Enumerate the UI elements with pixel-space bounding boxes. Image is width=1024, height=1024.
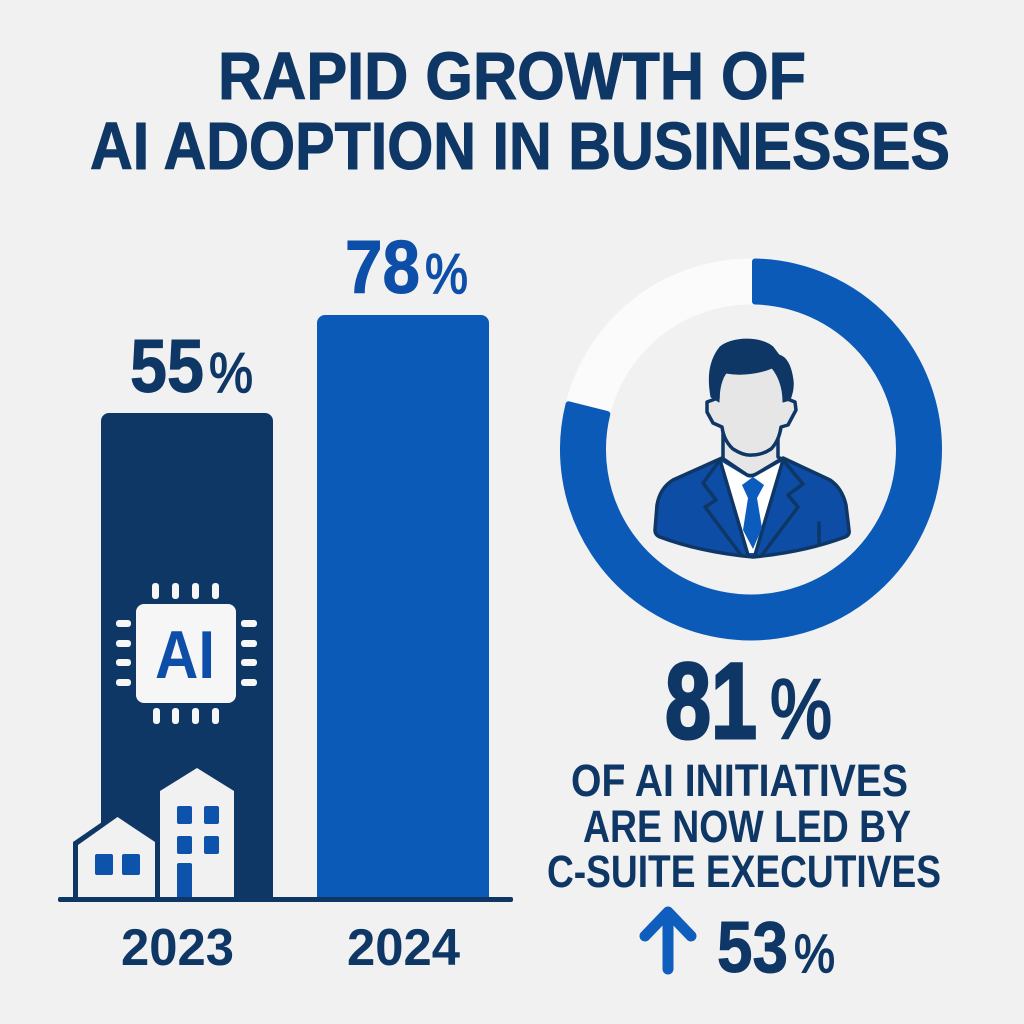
bar value: 55%: % [209,341,253,405]
bar value: 78%: % [425,242,468,306]
donut chart: 81% [563,262,939,637]
bar value: 55%: 55 [130,324,204,408]
icon: AI chip [116,583,257,724]
description text: C-SUITE EXECUTIVES [547,846,941,897]
description text [547,755,941,897]
lapels [703,460,803,555]
stat: 53%: 53 [717,908,788,988]
stat: 81%: 81 [665,640,757,761]
bar value: 55% [130,324,253,408]
bar: 2023 [101,413,273,899]
icon: AI chip: AI [155,617,215,693]
hair [709,339,793,402]
bar: 2024 [317,315,489,899]
jacket [655,458,849,557]
axis label: 2023: 2023 [121,919,234,977]
ears and face [707,362,796,455]
neck [722,428,783,476]
bar chart: adoption by year [58,225,513,977]
icon: buildings [73,768,234,899]
icon: up arrow [645,912,691,969]
stat: 53% [717,908,835,988]
axis label: 2024: 2024 [347,919,460,977]
axis baseline [58,897,513,902]
stat: 53%: % [794,924,835,984]
title: RAPID GROWTH OF [218,39,806,114]
stat: 81%: % [770,662,832,756]
icon: executive [655,339,849,557]
description text: OF AI INITIATIVES [571,755,908,806]
description text: ARE NOW LED BY [583,801,911,852]
bar value: 78% [345,225,468,309]
bar value: 78%: 78 [345,225,420,309]
shirt [722,462,781,553]
title [90,39,950,184]
tie [742,477,764,549]
